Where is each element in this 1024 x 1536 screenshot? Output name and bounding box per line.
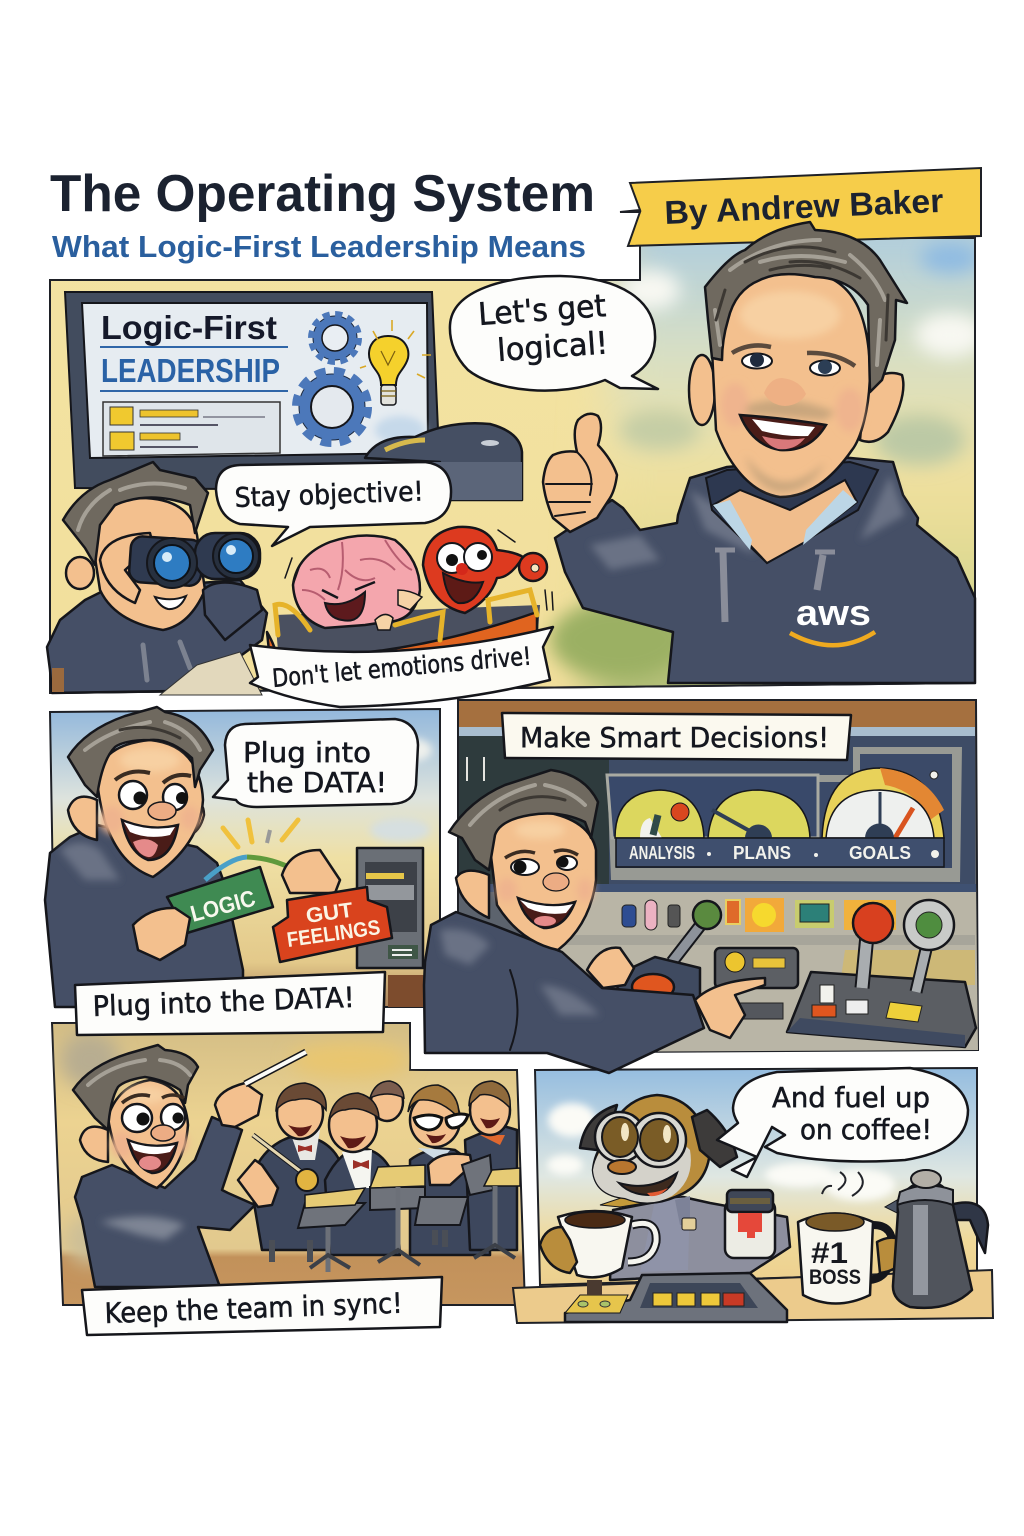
gauge labels: [629, 843, 939, 863]
tag: logic: [167, 857, 300, 933]
eyes: [505, 850, 578, 875]
control box: [715, 948, 798, 1019]
lower hand and baton: [253, 1135, 308, 1177]
caption: don't let emotions drive: Don't let emotions drive!: [271, 641, 533, 693]
character: dog pilot: [580, 1095, 790, 1280]
icon: light bulb: [360, 320, 431, 405]
gauge labels: PLANS: [733, 843, 791, 863]
coffee mug left: [540, 1211, 656, 1277]
body: [610, 1197, 790, 1280]
dog paw: [540, 1227, 577, 1273]
monitor subheading: LEADERSHIP: [101, 352, 280, 389]
speech bubble: fuel up on coffee: [717, 1068, 968, 1177]
dog paw on mug: [877, 1238, 908, 1273]
music stands: [272, 1155, 520, 1272]
hood neck opening: [706, 462, 878, 563]
document panel: [103, 402, 280, 456]
coffee mug: #1 boss: [798, 1213, 908, 1304]
nose: [543, 873, 569, 891]
panel background: [50, 709, 440, 1007]
ear: [456, 871, 489, 918]
face: [712, 270, 870, 497]
face: [489, 812, 596, 950]
hoodie: [424, 912, 704, 1073]
ears: [689, 355, 903, 442]
gauge labels: ANALYSIS: [629, 843, 695, 863]
caption: keep the team in sync: [82, 1277, 442, 1335]
coffee mug: #1 boss: #1: [811, 1237, 848, 1270]
binoculars: [128, 533, 260, 588]
coffee mug: #1 boss: BOSS: [809, 1266, 861, 1289]
eyes and brows: [115, 772, 191, 810]
data machine: [357, 848, 440, 1007]
hair: [73, 1045, 198, 1130]
goggles: [595, 1112, 686, 1167]
mouth: [518, 898, 575, 928]
back row suits: [250, 1125, 517, 1255]
steam: [822, 1172, 863, 1196]
pointing hand: [695, 978, 765, 1038]
gauge board: [607, 747, 962, 882]
character: man holding plugs: [45, 707, 298, 1007]
eyes: [122, 1095, 185, 1132]
hand holding logic tag: [133, 908, 190, 960]
tag: gut feelings: GUT: [304, 899, 354, 928]
caption: make smart decisions: Make Smart Decisions!: [520, 721, 829, 754]
jar: [725, 1190, 775, 1258]
speech bubble: stay objective: Stay objective!: [234, 476, 424, 514]
aws logo: aws: [796, 592, 871, 633]
coffee kettle: [885, 1170, 988, 1308]
nose: [148, 802, 176, 820]
ear: [66, 557, 94, 589]
scarf: [600, 1190, 650, 1207]
hoodie body and arm: [555, 457, 975, 683]
mouth: [128, 1140, 177, 1173]
speech bubble: plug into the data: the DATA!: [247, 766, 387, 799]
icon: gears: [297, 314, 367, 442]
caption: make smart decisions: [502, 713, 851, 760]
speech bubble: let's get logical: logical!: [496, 325, 609, 369]
panel: smart decisions: [424, 700, 978, 1073]
fist: [587, 948, 634, 988]
hoodie shading: [590, 475, 905, 570]
levers: [616, 901, 721, 1008]
smile: [740, 415, 826, 450]
face: [97, 740, 203, 877]
smile: [155, 596, 186, 609]
group of team members: [250, 1081, 520, 1272]
caption: keep the team in sync: Keep the team in sync!: [104, 1287, 403, 1330]
control console: [460, 884, 978, 1052]
speech bubble: fuel up on coffee: And fuel up: [772, 1081, 930, 1114]
panel background: [535, 1068, 977, 1285]
nose: [764, 378, 806, 406]
panel: top hero: [47, 168, 1024, 720]
smiles: [288, 1118, 500, 1148]
hoodie: [75, 1117, 255, 1287]
panel background: [49, 237, 976, 694]
baton arm hands: [428, 1154, 472, 1185]
raised hand and baton: [215, 1083, 262, 1127]
console device: [565, 1273, 787, 1322]
glasses: [414, 1114, 468, 1130]
thumbs up hand: [543, 414, 617, 532]
caption: plug into the data: [75, 972, 385, 1035]
shirts and bow ties: [290, 1130, 505, 1188]
panel background: [52, 1023, 525, 1305]
author banner: By Andrew Baker: [664, 182, 944, 231]
tag: gut feelings: [273, 887, 392, 962]
heart: [423, 527, 523, 613]
hand: [100, 533, 153, 603]
character: large presenter in hoodie: [543, 222, 975, 683]
illustration: brain and heart in coaster car: [267, 527, 553, 680]
nose: [151, 1125, 175, 1141]
sparks: [223, 820, 298, 847]
hair: [68, 707, 213, 797]
face: [93, 498, 205, 630]
character: man with baton: [73, 1045, 318, 1287]
hoodie: [45, 825, 243, 1007]
snout and mouth: [608, 1160, 636, 1174]
hair: [63, 462, 208, 565]
face: [108, 1080, 188, 1188]
paper: [160, 652, 262, 695]
console buttons: [622, 898, 896, 932]
panel background: [425, 700, 978, 1053]
monitor heading: Logic-First: [101, 309, 277, 346]
hand holding gut tag: [282, 850, 340, 893]
ear: [80, 1127, 108, 1162]
monitor: [65, 292, 445, 490]
title: The Operating System: [50, 165, 595, 223]
hands: [375, 590, 422, 630]
speech bubble: fuel up on coffee: on coffee!: [800, 1113, 932, 1146]
aws logo: [790, 592, 875, 645]
speech bubble: let's get logical: [450, 276, 658, 391]
caption: plug into the data: Plug into the DATA!: [92, 981, 355, 1023]
eyes and brows: [732, 345, 855, 376]
speech bubble: let's get logical: Let's get: [477, 288, 607, 333]
gauges: [615, 768, 944, 838]
dark device: [365, 423, 522, 500]
heads: [277, 1083, 510, 1152]
lever base: [787, 900, 976, 1047]
caption: don't let emotions drive: [250, 627, 553, 707]
ears: [580, 1105, 617, 1150]
speech bubble: plug into the data: [213, 719, 418, 807]
tag: gut feelings: FEELINGS: [285, 916, 382, 952]
hood strings: [715, 550, 835, 622]
mouth: [122, 820, 178, 860]
hoodie: [47, 580, 267, 693]
panel: keep team in sync: [52, 1023, 525, 1335]
car interior: [275, 605, 540, 675]
character: man at console: [424, 770, 765, 1073]
character: man with binoculars: [47, 462, 267, 695]
brain: [293, 535, 420, 628]
car rails and base: [267, 612, 537, 680]
table: [513, 1270, 993, 1323]
hair: [449, 770, 598, 870]
gauge labels: GOALS: [849, 843, 911, 863]
tag: logic: LOGIC: [188, 885, 258, 927]
panel: fuel up on coffee: [513, 1068, 993, 1323]
head: [593, 1095, 710, 1203]
panel: plug into the data: [45, 707, 440, 1007]
hair: [705, 222, 907, 392]
speech bubble: plug into the data: Plug into: [243, 736, 371, 769]
ear left: [68, 797, 97, 840]
subtitle: What Logic-First Leadership Means: [52, 229, 586, 264]
author banner: [620, 168, 981, 246]
speech bubble: stay objective: [216, 462, 451, 546]
hair: [276, 1081, 510, 1120]
